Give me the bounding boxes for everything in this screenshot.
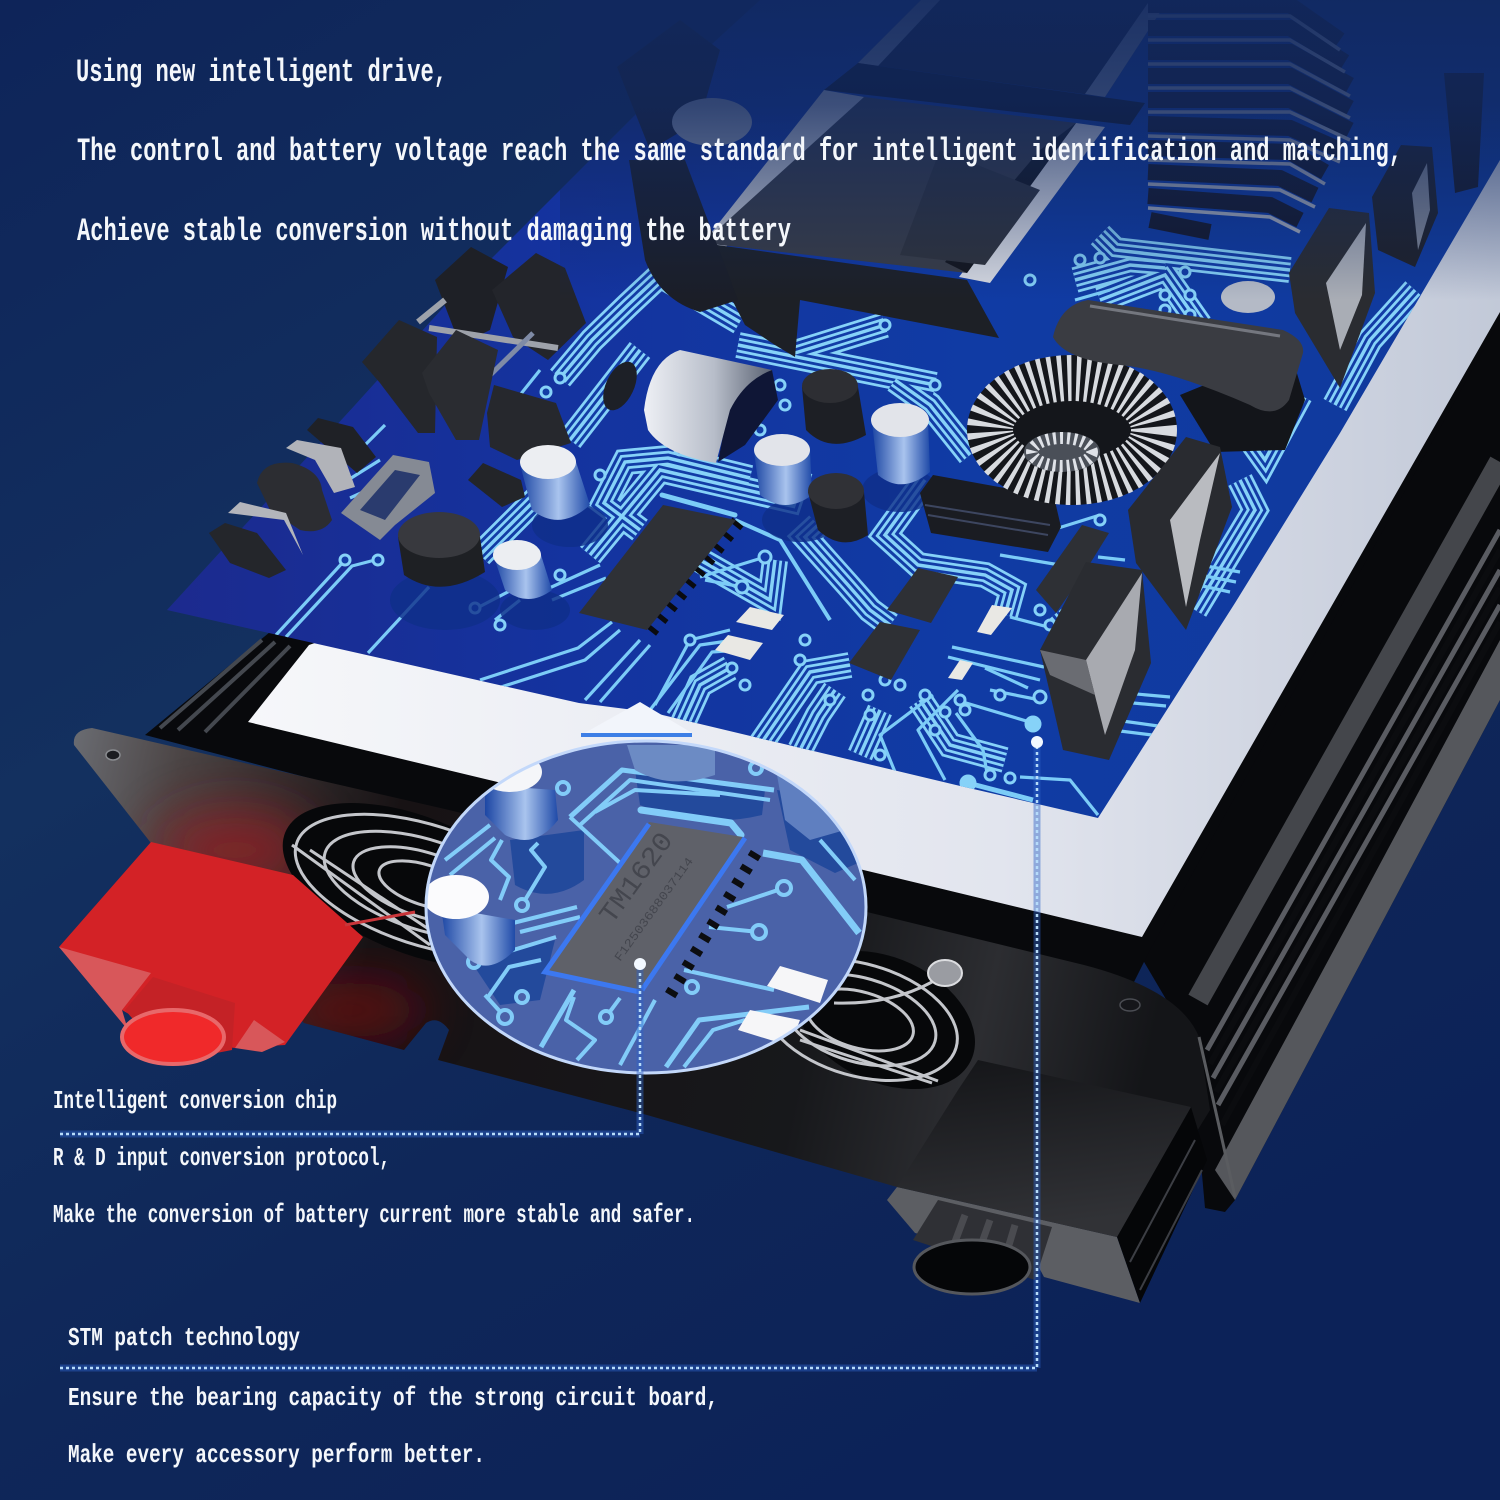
terminal right wedge: [235, 1020, 285, 1052]
component shadows: [390, 468, 938, 630]
target marker triangle: [581, 702, 692, 735]
dark capacitors: [802, 369, 868, 542]
caption: conversion chip: [53, 1086, 695, 1230]
lens chip pins: [666, 853, 756, 1002]
large upper-left components: [362, 247, 586, 507]
silver-top capacitors: [493, 281, 1275, 599]
red reflection on plate: [155, 808, 425, 1038]
lens disc: [426, 741, 866, 1073]
plate screw left: [106, 750, 120, 760]
chip small print: F12503688037114: [612, 855, 697, 964]
chip label: TM1620: [595, 828, 681, 930]
lens pads: [468, 762, 791, 1024]
left rails: [160, 640, 290, 732]
caption: patch technology: Make every accessory perform better.: [68, 1440, 485, 1470]
connector port: [914, 1240, 1030, 1294]
black prism components: [1040, 73, 1484, 760]
lens smd bottom: [738, 1010, 800, 1041]
black connector: [887, 1060, 1207, 1303]
top box transformer: [824, 0, 1168, 125]
heading text: Achieve stable conversion without damaging the battery: [77, 213, 791, 250]
leader dot: chip: [634, 958, 646, 970]
white sheet: [248, 150, 1500, 937]
connector side: [1117, 1107, 1207, 1303]
inductor coil: [1148, 5, 1350, 232]
case interior: [145, 240, 1500, 990]
main transformer: [703, 90, 1105, 357]
side fins: [1130, 312, 1500, 1212]
dotted leader: chip: [60, 965, 640, 1134]
connector tube: [913, 1200, 1052, 1280]
lens chip: [545, 822, 745, 992]
lens traces: [445, 760, 860, 1067]
connector underside: [887, 1187, 1140, 1303]
inverter case: [74, 150, 1500, 1240]
small chips: [849, 525, 1109, 680]
terminal left wedge: [59, 947, 151, 1030]
small cap: [596, 357, 644, 415]
lens rim: [426, 741, 866, 1073]
terminal socket: [122, 1010, 224, 1064]
leader dot: SMT: [1031, 736, 1043, 748]
lens smd top: [767, 966, 828, 1003]
fan reflection wire: [345, 912, 415, 925]
left fan grill: [260, 770, 572, 1000]
plate side edge: [1199, 1037, 1235, 1197]
cylinder inductor: [1053, 300, 1305, 452]
front plate: [74, 728, 1210, 1240]
solder pads: [340, 253, 1195, 790]
red terminal: [59, 842, 415, 1064]
toroid coil: [967, 355, 1177, 505]
right fan grill: [748, 924, 997, 1116]
foil capacitor: [644, 350, 778, 463]
caption: patch technology: STM patch technology: [68, 1323, 300, 1353]
terminal tube: [125, 977, 235, 1062]
lens metal capacitors: [423, 745, 845, 966]
heading text: Using new intelligent drive,: [76, 54, 447, 91]
fan screw: [928, 960, 962, 986]
lens capacitor shadows: [470, 770, 865, 1005]
top capacitors: [617, 20, 752, 312]
dotted leader: SMT: [60, 742, 1037, 1368]
lower-left components: [209, 418, 435, 578]
connector top: [897, 1060, 1191, 1237]
heading text: [76, 54, 1402, 250]
main chip: [579, 505, 738, 632]
lens contents: [423, 745, 865, 1067]
caption: patch technology: Ensure the bearing capacity of the strong circuit board,: [68, 1383, 718, 1413]
single circuit traces: [276, 290, 1240, 815]
caption: conversion chip: Make the conversion of battery current more stable and safer.: [53, 1200, 695, 1230]
caption: conversion chip: R & D input conversion protocol,: [53, 1143, 390, 1173]
top dimming overlay: [560, 0, 1500, 300]
magnifier lens: [423, 741, 866, 1073]
terminal body: [59, 842, 363, 1048]
caption: patch technology: [68, 1323, 718, 1470]
caption: conversion chip: Intelligent conversion chip: [53, 1086, 337, 1116]
connector opening bars: [1130, 1140, 1202, 1290]
plate screw right: [1120, 999, 1140, 1011]
circuit trace bundles: [480, 235, 1415, 760]
circuit board: [167, 0, 1500, 818]
black radial capacitor: [398, 512, 485, 587]
board surface: [167, 0, 1500, 818]
smd parts: [715, 605, 1012, 680]
long chip: [920, 475, 1061, 552]
